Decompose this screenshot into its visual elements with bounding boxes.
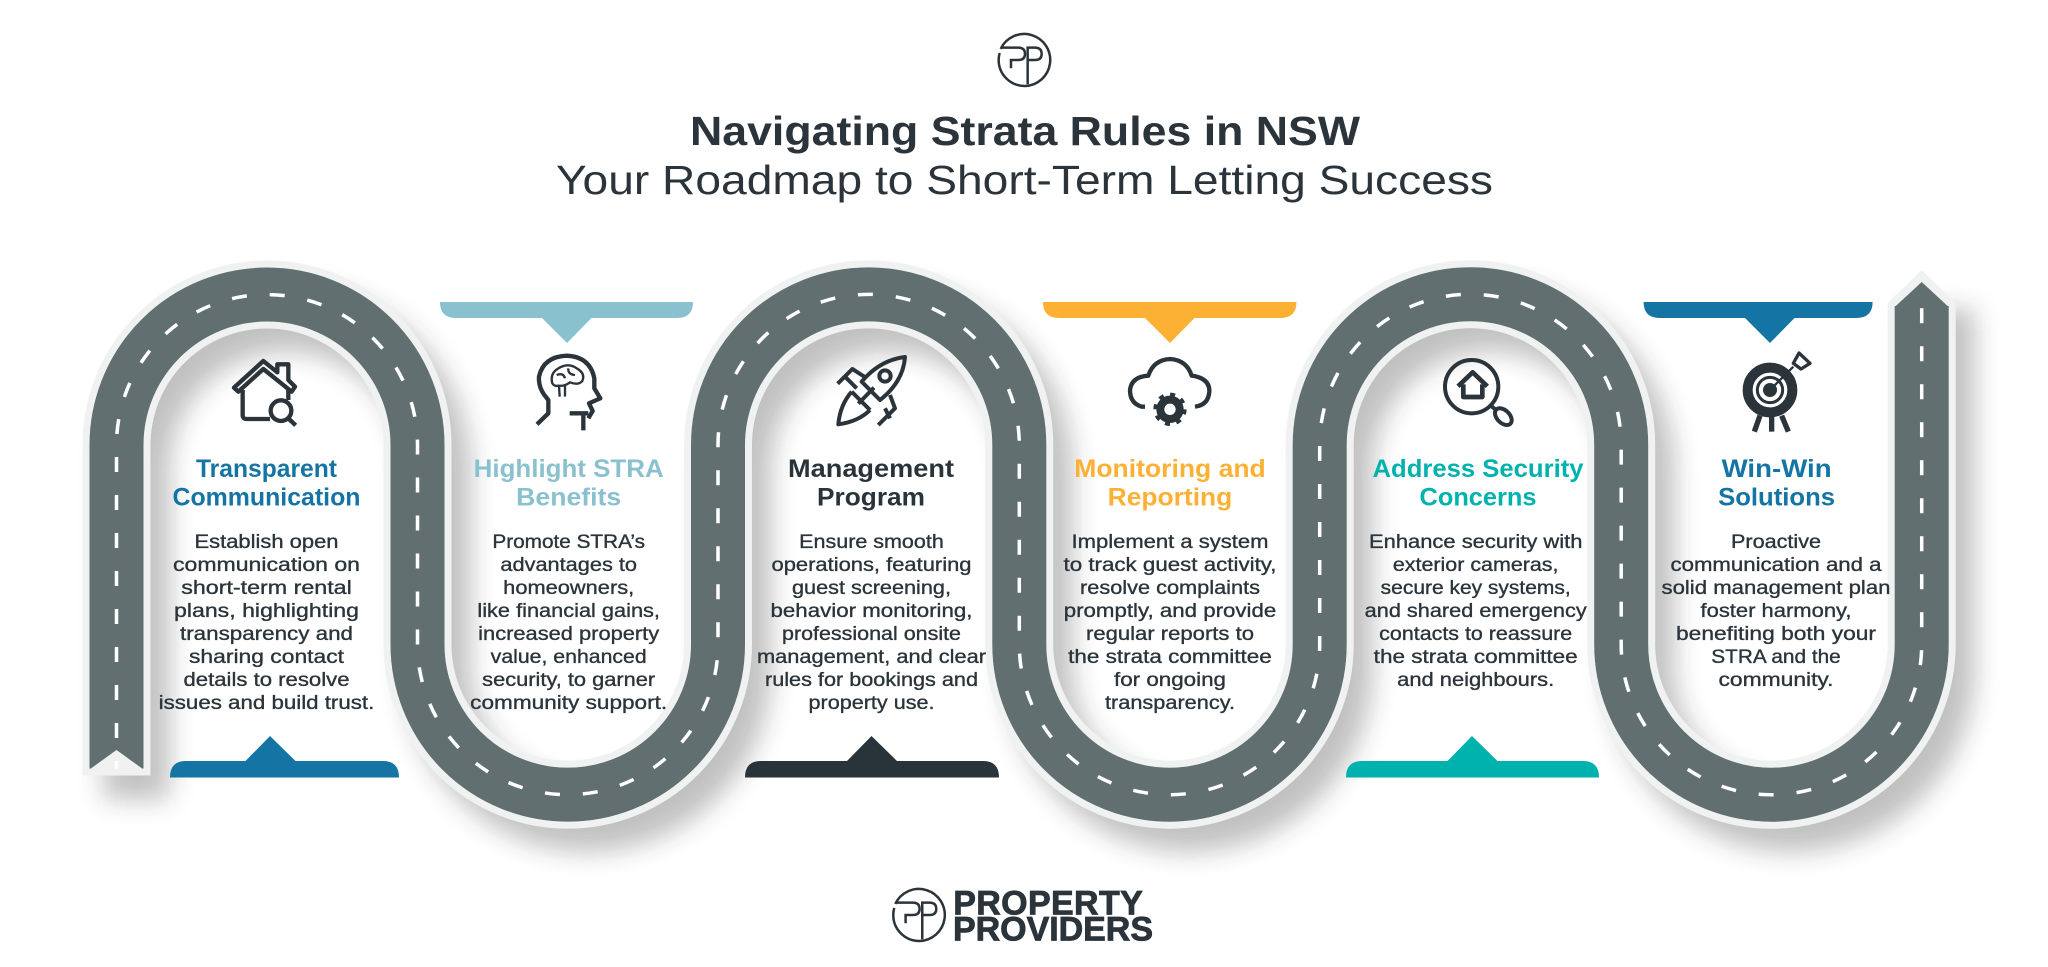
body text: exterior cameras, <box>1393 554 1558 576</box>
subtitle: Your Roadmap to Short-Term Letting Success <box>556 157 1493 203</box>
body text: for ongoing <box>1114 669 1226 691</box>
body text: communication and a <box>1670 554 1882 576</box>
body text: the strata committee <box>1068 646 1272 668</box>
title: Navigating Strata Rules in NSW <box>690 108 1360 154</box>
heading: Transparent <box>196 455 338 483</box>
heading: Program <box>817 484 925 512</box>
icon: house search <box>234 361 296 425</box>
icon: target with arrow <box>1748 353 1810 432</box>
wordmark <box>953 884 1153 949</box>
body text: security, to garner <box>482 669 656 691</box>
body text: guest screening, <box>792 577 951 599</box>
body text: to track guest activity, <box>1064 554 1276 576</box>
body text: increased property <box>478 623 659 645</box>
panel: Management Program <box>745 357 999 778</box>
body text: Promote STRA’s <box>492 531 645 553</box>
body text: community support. <box>470 692 667 714</box>
body text: transparency. <box>1105 692 1235 714</box>
body text: foster harmony, <box>1700 600 1852 622</box>
body text <box>1662 531 1890 691</box>
icon: cloud gear <box>1130 359 1209 424</box>
body text: homeowners, <box>503 577 634 599</box>
heading <box>474 455 664 512</box>
body text: Enhance security with <box>1369 531 1582 553</box>
heading <box>788 455 955 512</box>
body text <box>1064 531 1276 714</box>
footer logo: Property Providers <box>893 884 1153 949</box>
body text: Proactive <box>1731 531 1821 553</box>
body text: professional onsite <box>782 623 961 645</box>
heading: Address Security <box>1372 455 1584 483</box>
body text: transparency and <box>180 623 353 645</box>
wordmark: PROVIDERS <box>953 911 1153 949</box>
banner <box>440 302 693 343</box>
banner <box>1346 736 1599 778</box>
heading: Reporting <box>1108 484 1232 512</box>
body text <box>1365 531 1587 691</box>
body text: like financial gains, <box>477 600 660 622</box>
heading: Highlight STRA <box>474 455 664 483</box>
body text: sharing contact <box>189 646 345 668</box>
heading: Solutions <box>1718 484 1835 512</box>
body text: secure key systems, <box>1381 577 1571 599</box>
body text: management, and clear <box>757 646 986 668</box>
icon: magnifier home <box>1445 360 1515 428</box>
body text: and neighbours. <box>1397 669 1554 691</box>
body text: benefiting both your <box>1676 623 1876 645</box>
body text: Implement a system <box>1072 531 1268 553</box>
body text: rules for bookings and <box>765 669 978 691</box>
heading: Win-Win <box>1722 455 1832 483</box>
heading: Communication <box>172 484 360 512</box>
body text: and shared emergency <box>1365 600 1587 622</box>
banner <box>170 736 399 778</box>
icon: footer PP mark <box>893 889 945 941</box>
heading: Benefits <box>516 484 621 512</box>
body text: the strata committee <box>1374 646 1578 668</box>
panel: Address Security Concerns <box>1346 360 1599 778</box>
body text: communication on <box>173 554 360 576</box>
body text: regular reports to <box>1086 623 1254 645</box>
body text <box>757 531 986 714</box>
body text: value, enhanced <box>491 646 647 668</box>
heading <box>1372 455 1584 512</box>
body text: Ensure smooth <box>799 531 944 553</box>
body text: community. <box>1718 669 1834 691</box>
winding road <box>90 270 1956 819</box>
banner <box>745 736 999 778</box>
wordmark: PROPERTY <box>953 884 1143 922</box>
body text: behavior monitoring, <box>770 600 972 622</box>
panel: Monitoring and Reporting <box>1043 302 1296 714</box>
body text: solid management plan <box>1662 577 1890 599</box>
body text: property use. <box>808 692 934 714</box>
banner <box>1043 302 1296 343</box>
body text: contacts to reassure <box>1379 623 1572 645</box>
body text: details to resolve <box>184 669 350 691</box>
body text: Establish open <box>194 531 338 553</box>
icon: head with brain <box>537 356 600 430</box>
heading <box>1074 455 1266 512</box>
body text: issues and build trust. <box>159 692 374 714</box>
body text: resolve complaints <box>1080 577 1260 599</box>
banner <box>1644 302 1873 343</box>
body text <box>470 531 667 714</box>
body text: operations, featuring <box>772 554 972 576</box>
body text: short-term rental <box>181 577 352 599</box>
panel: Highlight STRA Benefits <box>440 302 693 714</box>
icon: rocket <box>838 357 905 425</box>
body text: promptly, and provide <box>1064 600 1276 622</box>
logo: top PP mark <box>999 34 1050 86</box>
panel: Win-Win Solutions <box>1644 302 1890 691</box>
heading <box>1718 455 1835 512</box>
panel: Transparent Communication <box>159 361 399 778</box>
heading: Management <box>788 455 955 483</box>
body text: STRA and the <box>1711 646 1841 668</box>
heading: Monitoring and <box>1074 455 1266 483</box>
heading <box>172 455 360 512</box>
body text <box>159 531 374 714</box>
heading: Concerns <box>1420 484 1536 512</box>
body text: advantages to <box>500 554 637 576</box>
body text: plans, highlighting <box>174 600 359 622</box>
